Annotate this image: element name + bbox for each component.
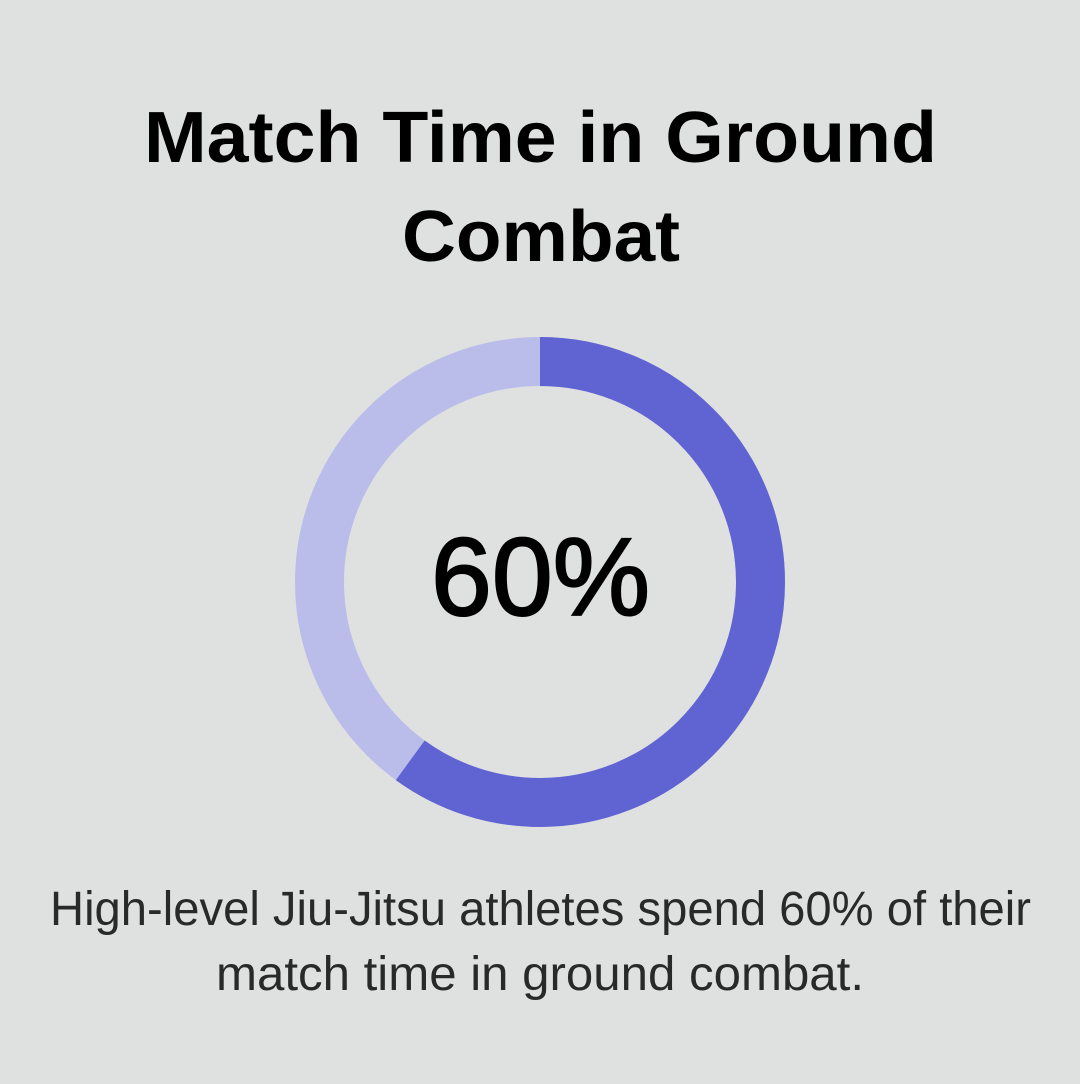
description text: match time in ground combat. bbox=[216, 948, 864, 1001]
center value: 60% bbox=[431, 516, 650, 639]
title: Combat bbox=[402, 197, 680, 277]
donut chart: 60% bbox=[320, 362, 760, 802]
description text: High-level Jiu-Jitsu athletes spend 60% of their bbox=[50, 883, 1031, 936]
description text bbox=[50, 883, 1031, 1001]
title bbox=[144, 98, 937, 277]
highlighted 60% arc bbox=[320, 362, 760, 802]
remaining 40% ring bbox=[320, 362, 760, 802]
title: Match Time in Ground bbox=[144, 98, 937, 178]
